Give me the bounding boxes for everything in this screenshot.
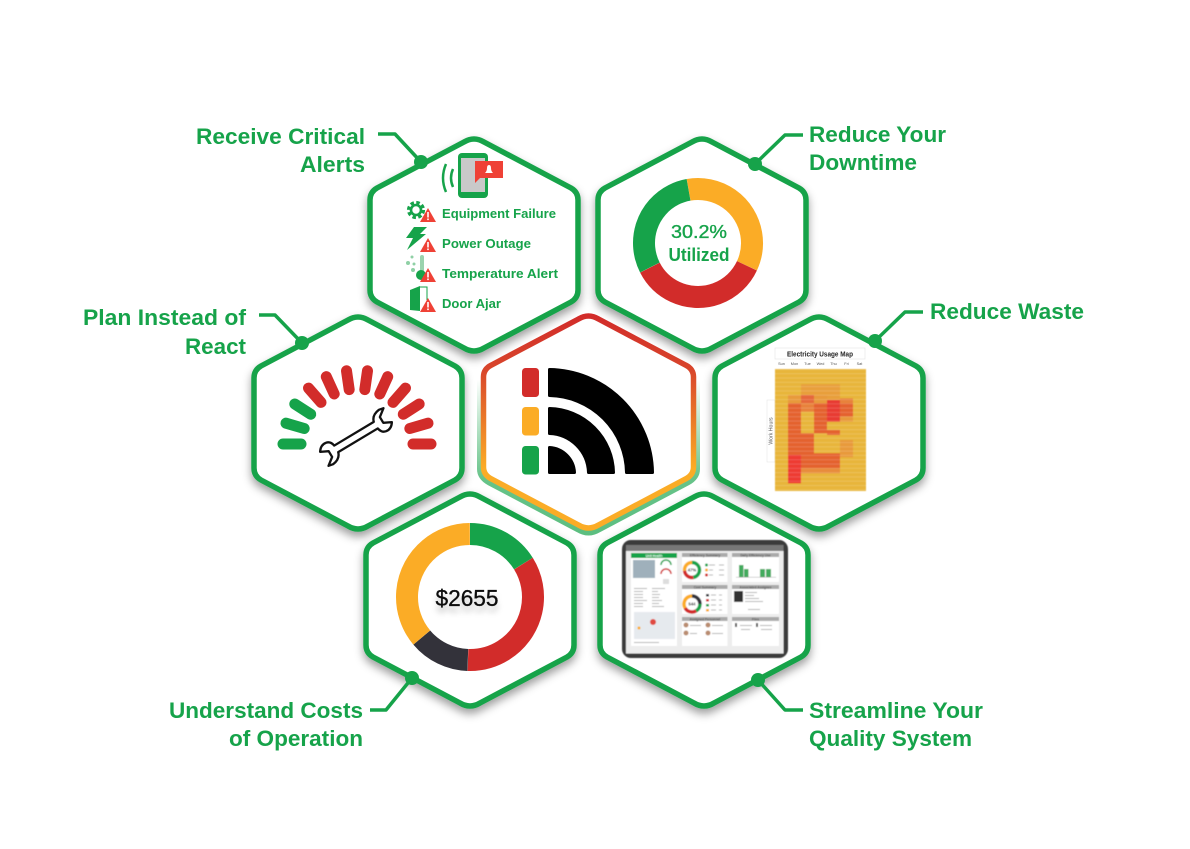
- dashboard panel: files: Files: [752, 618, 759, 622]
- text: equipment failure: Equipment Failure: [442, 206, 556, 221]
- dashboard panel: daily efficiency: Daily Efficiency Use: [740, 554, 771, 558]
- icon: signal arcs: [550, 370, 652, 472]
- panel: plan instead of react: [254, 317, 462, 529]
- label: streamline your quality system: Quality System: [809, 726, 972, 751]
- day labels: Fri: [844, 362, 849, 366]
- axis label: work hours: [767, 400, 775, 462]
- icon: phone alert: [443, 153, 503, 198]
- axis label: work hours: Work Hours: [768, 417, 774, 445]
- text: temperature alert: Temperature Alert: [442, 266, 559, 281]
- connector: [370, 671, 419, 710]
- hexagon outline: [598, 139, 806, 351]
- label: streamline your quality system: Streamline Your: [809, 698, 983, 723]
- panel: reduce your downtime: [598, 139, 806, 351]
- icon: power outage: [406, 227, 436, 252]
- tablet dashboard: [622, 540, 788, 658]
- hexagon outline: [715, 317, 923, 529]
- dashboard panel: efficiency summary: Efficiency Summary: [690, 554, 720, 558]
- panel: receive critical alerts: [370, 139, 578, 351]
- label: reduce your downtime: Reduce Your: [809, 122, 946, 147]
- label: understand costs of operation: [169, 671, 419, 751]
- hexagon outline: [484, 316, 694, 528]
- label: reduce waste: [868, 299, 1084, 348]
- donut chart: utilization: [625, 170, 771, 316]
- panel: streamline quality system: [600, 494, 808, 706]
- text: door ajar: Door Ajar: [442, 296, 501, 311]
- label: reduce your downtime: Downtime: [809, 150, 917, 175]
- dashboard panel: efficiency summary: 47%: [688, 568, 696, 572]
- gauge ticks: [283, 371, 431, 444]
- panel: understand costs of operation: [366, 494, 574, 706]
- dashboard panel: efficiency summary: [682, 553, 728, 582]
- label: understand costs of operation: Understand Costs: [169, 698, 363, 723]
- day labels: Mon: [791, 362, 798, 366]
- label: understand costs of operation: of Operation: [229, 726, 363, 751]
- dashboard panel: files: [732, 617, 779, 646]
- connector: [259, 315, 309, 350]
- dashboard panel: unit health: [631, 553, 677, 646]
- dashboard panel: daily efficiency: [732, 553, 779, 582]
- day labels: Sat: [857, 362, 863, 366]
- day labels: Tue: [804, 362, 811, 366]
- dashboard panel: cost summary: [681, 585, 728, 615]
- icon: status lights: [522, 368, 539, 474]
- text: utilized value: [668, 222, 730, 265]
- connector: [751, 673, 803, 710]
- label: streamline your quality system: [751, 673, 983, 751]
- connector: [378, 134, 428, 169]
- panel: center logo: [480, 314, 696, 532]
- hexagon outline: [370, 139, 578, 351]
- panel: reduce waste: [715, 317, 923, 529]
- heat map: [775, 369, 866, 491]
- hexagon outline: [366, 494, 574, 706]
- day labels: Thu: [830, 362, 837, 366]
- text: utilized value: 30.2%: [671, 222, 727, 242]
- green glow outline: [480, 314, 696, 532]
- dashboard panel: unit health: Unit Health: [646, 554, 662, 558]
- label: reduce waste: Reduce Waste: [930, 299, 1084, 324]
- dashboard panel: associated assignee: Associated Assignee: [740, 586, 772, 590]
- connector: [868, 312, 923, 348]
- icon: door ajar: [410, 286, 436, 312]
- icon: wrench: [317, 407, 395, 467]
- hexagon outline: [600, 494, 808, 706]
- label: receive critical alerts: [196, 124, 428, 177]
- label: receive critical alerts: Alerts: [300, 152, 365, 177]
- day labels: [778, 362, 863, 366]
- text: utilized value: Utilized: [668, 245, 730, 265]
- chart title: Electricity Usage Map: [787, 350, 853, 358]
- day labels: Sun: [778, 362, 785, 366]
- donut chart: costs: [381, 508, 559, 686]
- label: plan instead of react: Plan Instead of: [83, 305, 247, 330]
- text: power outage: Power Outage: [442, 236, 531, 251]
- hexagon outline: [254, 317, 462, 529]
- icon: equipment failure: [408, 202, 436, 222]
- dashboard panel: assigned personnel: [682, 617, 728, 646]
- label: plan instead of react: React: [185, 334, 247, 359]
- dashboard panel: associated assignee: [732, 585, 779, 614]
- day labels: Wed: [817, 362, 824, 366]
- dashboard panel: cost summary: Cost Summary: [694, 586, 716, 590]
- label: receive critical alerts: Receive Critical: [196, 124, 365, 149]
- icon: temperature alert: [406, 255, 436, 282]
- dashboard panel: assigned personnel: Assigned Personnel: [690, 618, 720, 622]
- label: reduce your downtime: [748, 122, 946, 175]
- label: plan instead of react: [83, 305, 309, 359]
- connector: [748, 135, 803, 171]
- dashboard panel: cost summary: 544: [688, 602, 696, 606]
- text: cost value: $2655: [436, 585, 498, 611]
